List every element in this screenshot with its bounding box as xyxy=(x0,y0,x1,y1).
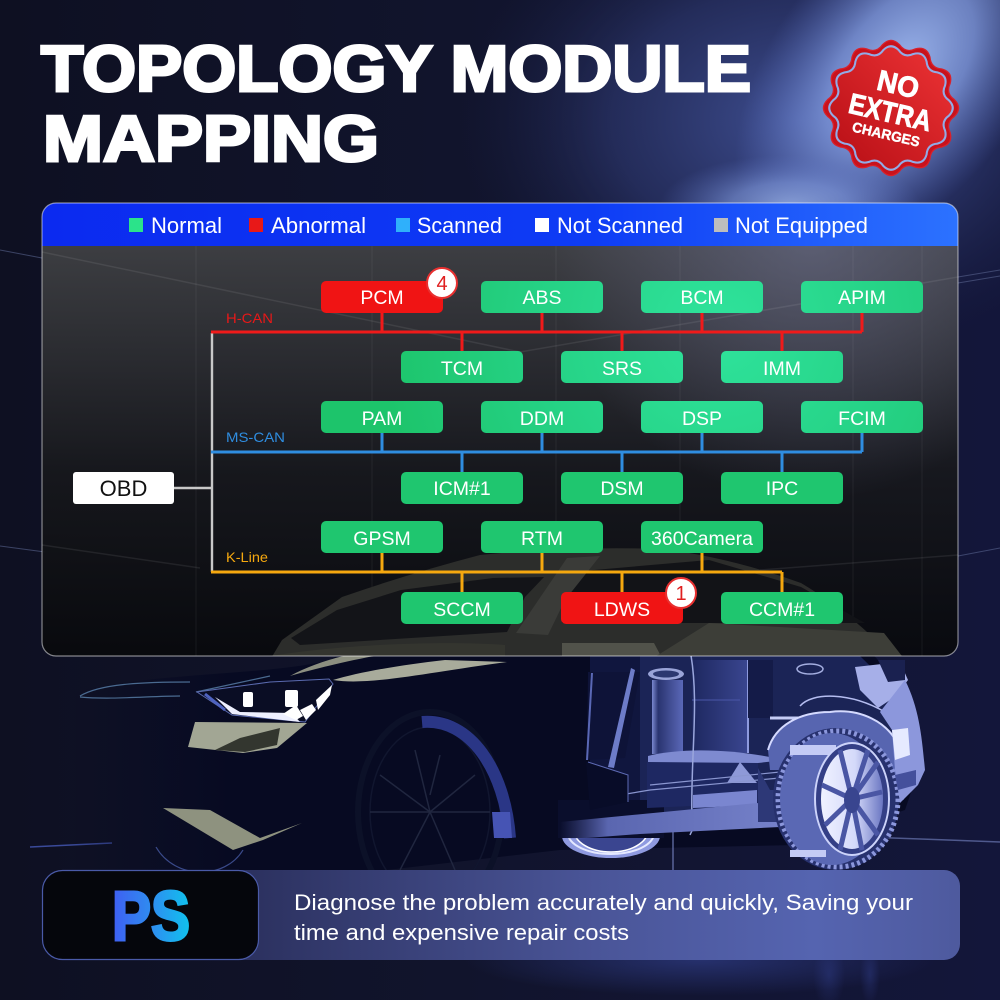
front bumper xyxy=(855,660,925,803)
legend: not equipped: Not Equipped xyxy=(735,213,868,238)
lit door and body area xyxy=(640,656,900,812)
nose lines xyxy=(80,676,270,698)
module GPSM: GPSM xyxy=(353,528,411,550)
module APIM: APIM xyxy=(838,287,886,309)
module DSM xyxy=(561,472,683,504)
module ICM#1 xyxy=(401,472,523,504)
module TCM: TCM xyxy=(441,358,483,380)
module BCM xyxy=(641,281,763,313)
bottom banner xyxy=(42,870,960,960)
bus: H-CAN xyxy=(211,310,862,351)
headlight xyxy=(197,679,333,722)
module DSP: DSP xyxy=(682,408,722,430)
panel: topology map xyxy=(42,203,958,660)
bus: K-Line: K-Line xyxy=(226,549,268,565)
module TCM xyxy=(401,351,523,383)
panel background xyxy=(42,246,958,656)
module LDWS fault count: 1 xyxy=(675,583,687,605)
module PCM fault count xyxy=(427,268,457,298)
OBD box xyxy=(73,472,174,504)
bus trunk xyxy=(174,333,212,572)
module PAM: PAM xyxy=(362,408,402,430)
bus: H-CAN: H-CAN xyxy=(226,310,273,326)
front wheel arch xyxy=(758,696,904,822)
bus: MS-CAN xyxy=(211,429,862,472)
bus: K-Line xyxy=(211,549,782,592)
legend: not scanned: Not Scanned xyxy=(557,213,683,238)
legend: normal: Normal xyxy=(151,213,222,238)
legend: scanned: Scanned xyxy=(417,213,502,238)
module CCM#1: CCM#1 xyxy=(749,599,815,621)
module SRS: SRS xyxy=(602,358,642,380)
module SRS xyxy=(561,351,683,383)
module DDM xyxy=(481,401,603,433)
module CCM#1 xyxy=(721,592,843,624)
module GPSM xyxy=(321,521,443,553)
car illustration xyxy=(80,656,925,870)
module SCCM: SCCM xyxy=(433,599,491,621)
OBD box: OBD xyxy=(100,476,147,501)
rear wheel xyxy=(558,800,664,858)
module PCM xyxy=(321,281,443,313)
module LDWS fault count xyxy=(666,578,696,608)
module IPC: IPC xyxy=(766,478,798,500)
module DSP xyxy=(641,401,763,433)
module 360Camera: 360Camera xyxy=(651,528,753,550)
fender highlight xyxy=(188,722,307,753)
module BCM: BCM xyxy=(680,287,724,309)
module APIM xyxy=(801,281,923,313)
PS logo box: PS xyxy=(112,877,190,955)
title: TOPOLOGY MODULE xyxy=(41,32,751,105)
car roof seen through panel xyxy=(250,548,905,660)
legend: abnormal: Abnormal xyxy=(271,213,366,238)
module ABS xyxy=(481,281,603,313)
module RTM xyxy=(481,521,603,553)
car body silhouette xyxy=(81,656,911,870)
bumper highlight xyxy=(163,808,302,850)
PS logo box xyxy=(42,870,258,960)
bus: MS-CAN: MS-CAN xyxy=(226,429,285,445)
module 360Camera xyxy=(641,521,763,553)
module DSM: DSM xyxy=(600,478,644,500)
description bar xyxy=(230,870,960,960)
module ABS: ABS xyxy=(522,287,562,309)
floor reflections xyxy=(672,832,674,870)
badge: no extra charges: NO xyxy=(874,65,922,106)
door structure xyxy=(586,650,823,835)
module LDWS: LDWS xyxy=(594,599,650,621)
module FCIM: FCIM xyxy=(838,408,886,430)
module DDM: DDM xyxy=(520,408,564,430)
front wheel xyxy=(156,716,516,870)
module PAM xyxy=(321,401,443,433)
title: MAPPING xyxy=(43,102,379,175)
panel border xyxy=(42,203,958,656)
badge: no extra charges xyxy=(823,40,959,176)
hood highlight xyxy=(290,656,507,682)
module IMM: IMM xyxy=(763,358,801,380)
module PCM fault count: 4 xyxy=(436,273,448,295)
description text: Diagnose the problem accurately and quickly, Saving your xyxy=(294,890,913,915)
description text xyxy=(294,890,913,945)
module LDWS xyxy=(561,592,683,624)
module PCM: PCM xyxy=(360,287,404,309)
module FCIM xyxy=(801,401,923,433)
badge: no extra charges: EXTRA xyxy=(846,88,935,138)
module SCCM xyxy=(401,592,523,624)
description text: time and expensive repair costs xyxy=(294,920,629,945)
front wheel x-ray xyxy=(773,728,899,870)
sill xyxy=(564,803,778,840)
module RTM: RTM xyxy=(521,528,563,550)
legend bar xyxy=(42,203,958,246)
module IPC xyxy=(721,472,843,504)
badge: no extra charges: CHARGES xyxy=(851,119,922,150)
module IMM xyxy=(721,351,843,383)
title xyxy=(41,32,751,175)
module ICM#1: ICM#1 xyxy=(433,478,491,500)
